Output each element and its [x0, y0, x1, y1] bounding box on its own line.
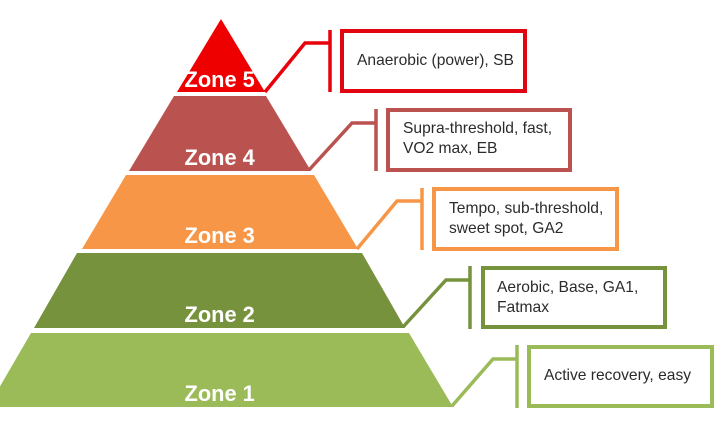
callout: Zone 1 description: Active recovery, easy	[544, 367, 691, 384]
pyramid tier: Zone 2: Zone 2	[184, 302, 255, 327]
pyramid tier: Zone 5: Zone 5	[184, 67, 255, 92]
callout: Zone 5 description	[265, 30, 525, 92]
callout: Zone 4 description: Supra-threshold, fast,	[403, 120, 552, 137]
pyramid tier: Zone 4: Zone 4	[184, 145, 255, 170]
callout: Zone 3 description: Tempo, sub-threshold,	[449, 200, 603, 217]
callout: Zone 4 description: VO2 max, EB	[403, 140, 497, 157]
callout: Zone 3 description	[357, 188, 617, 250]
pyramid tier: Zone 2	[34, 253, 405, 328]
pyramid tier: Zone 3: Zone 3	[184, 223, 255, 248]
pyramid tier: Zone 1	[0, 333, 453, 407]
callout: Zone 2 description: Aerobic, Base, GA1,	[497, 279, 638, 296]
pyramid tier: Zone 3	[82, 175, 358, 249]
callout: Zone 2 description: Fatmax	[497, 299, 549, 316]
pyramid tier: Zone 4	[129, 96, 311, 171]
callout: Zone 5 description: Anaerobic (power), SB	[357, 52, 514, 69]
pyramid tier: Zone 1: Zone 1	[184, 381, 255, 406]
callout: Zone 2 description	[403, 266, 665, 329]
pyramid tier: Zone 5	[177, 19, 265, 92]
callout: Zone 4 description	[309, 109, 570, 171]
callout: Zone 3 description: sweet spot, GA2	[449, 220, 563, 237]
callout: Zone 1 description	[452, 345, 712, 408]
